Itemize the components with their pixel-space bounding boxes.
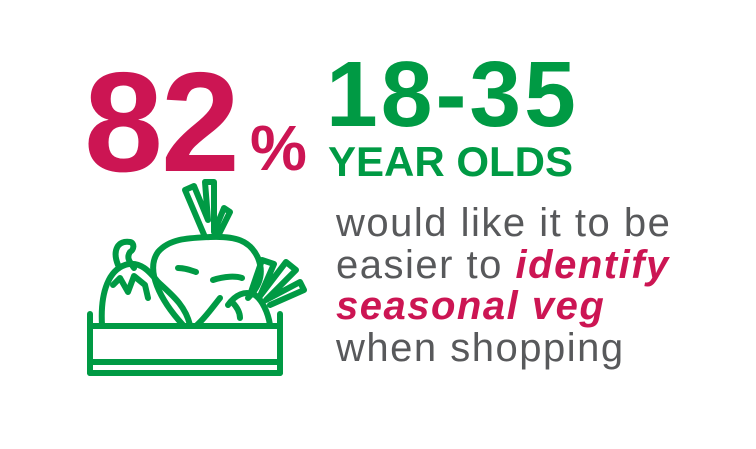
body text xyxy=(336,201,671,370)
body text: easier to identify xyxy=(336,242,670,286)
body text: seasonal veg xyxy=(336,284,605,328)
body text: when shopping xyxy=(336,326,625,370)
body text: would like it to be xyxy=(336,201,671,245)
year olds label: YEAR OLDS xyxy=(328,138,573,185)
percent sign: % xyxy=(250,112,307,184)
age range 18-35: 18-35 xyxy=(326,42,579,146)
big stat 82: 82 xyxy=(84,43,238,202)
